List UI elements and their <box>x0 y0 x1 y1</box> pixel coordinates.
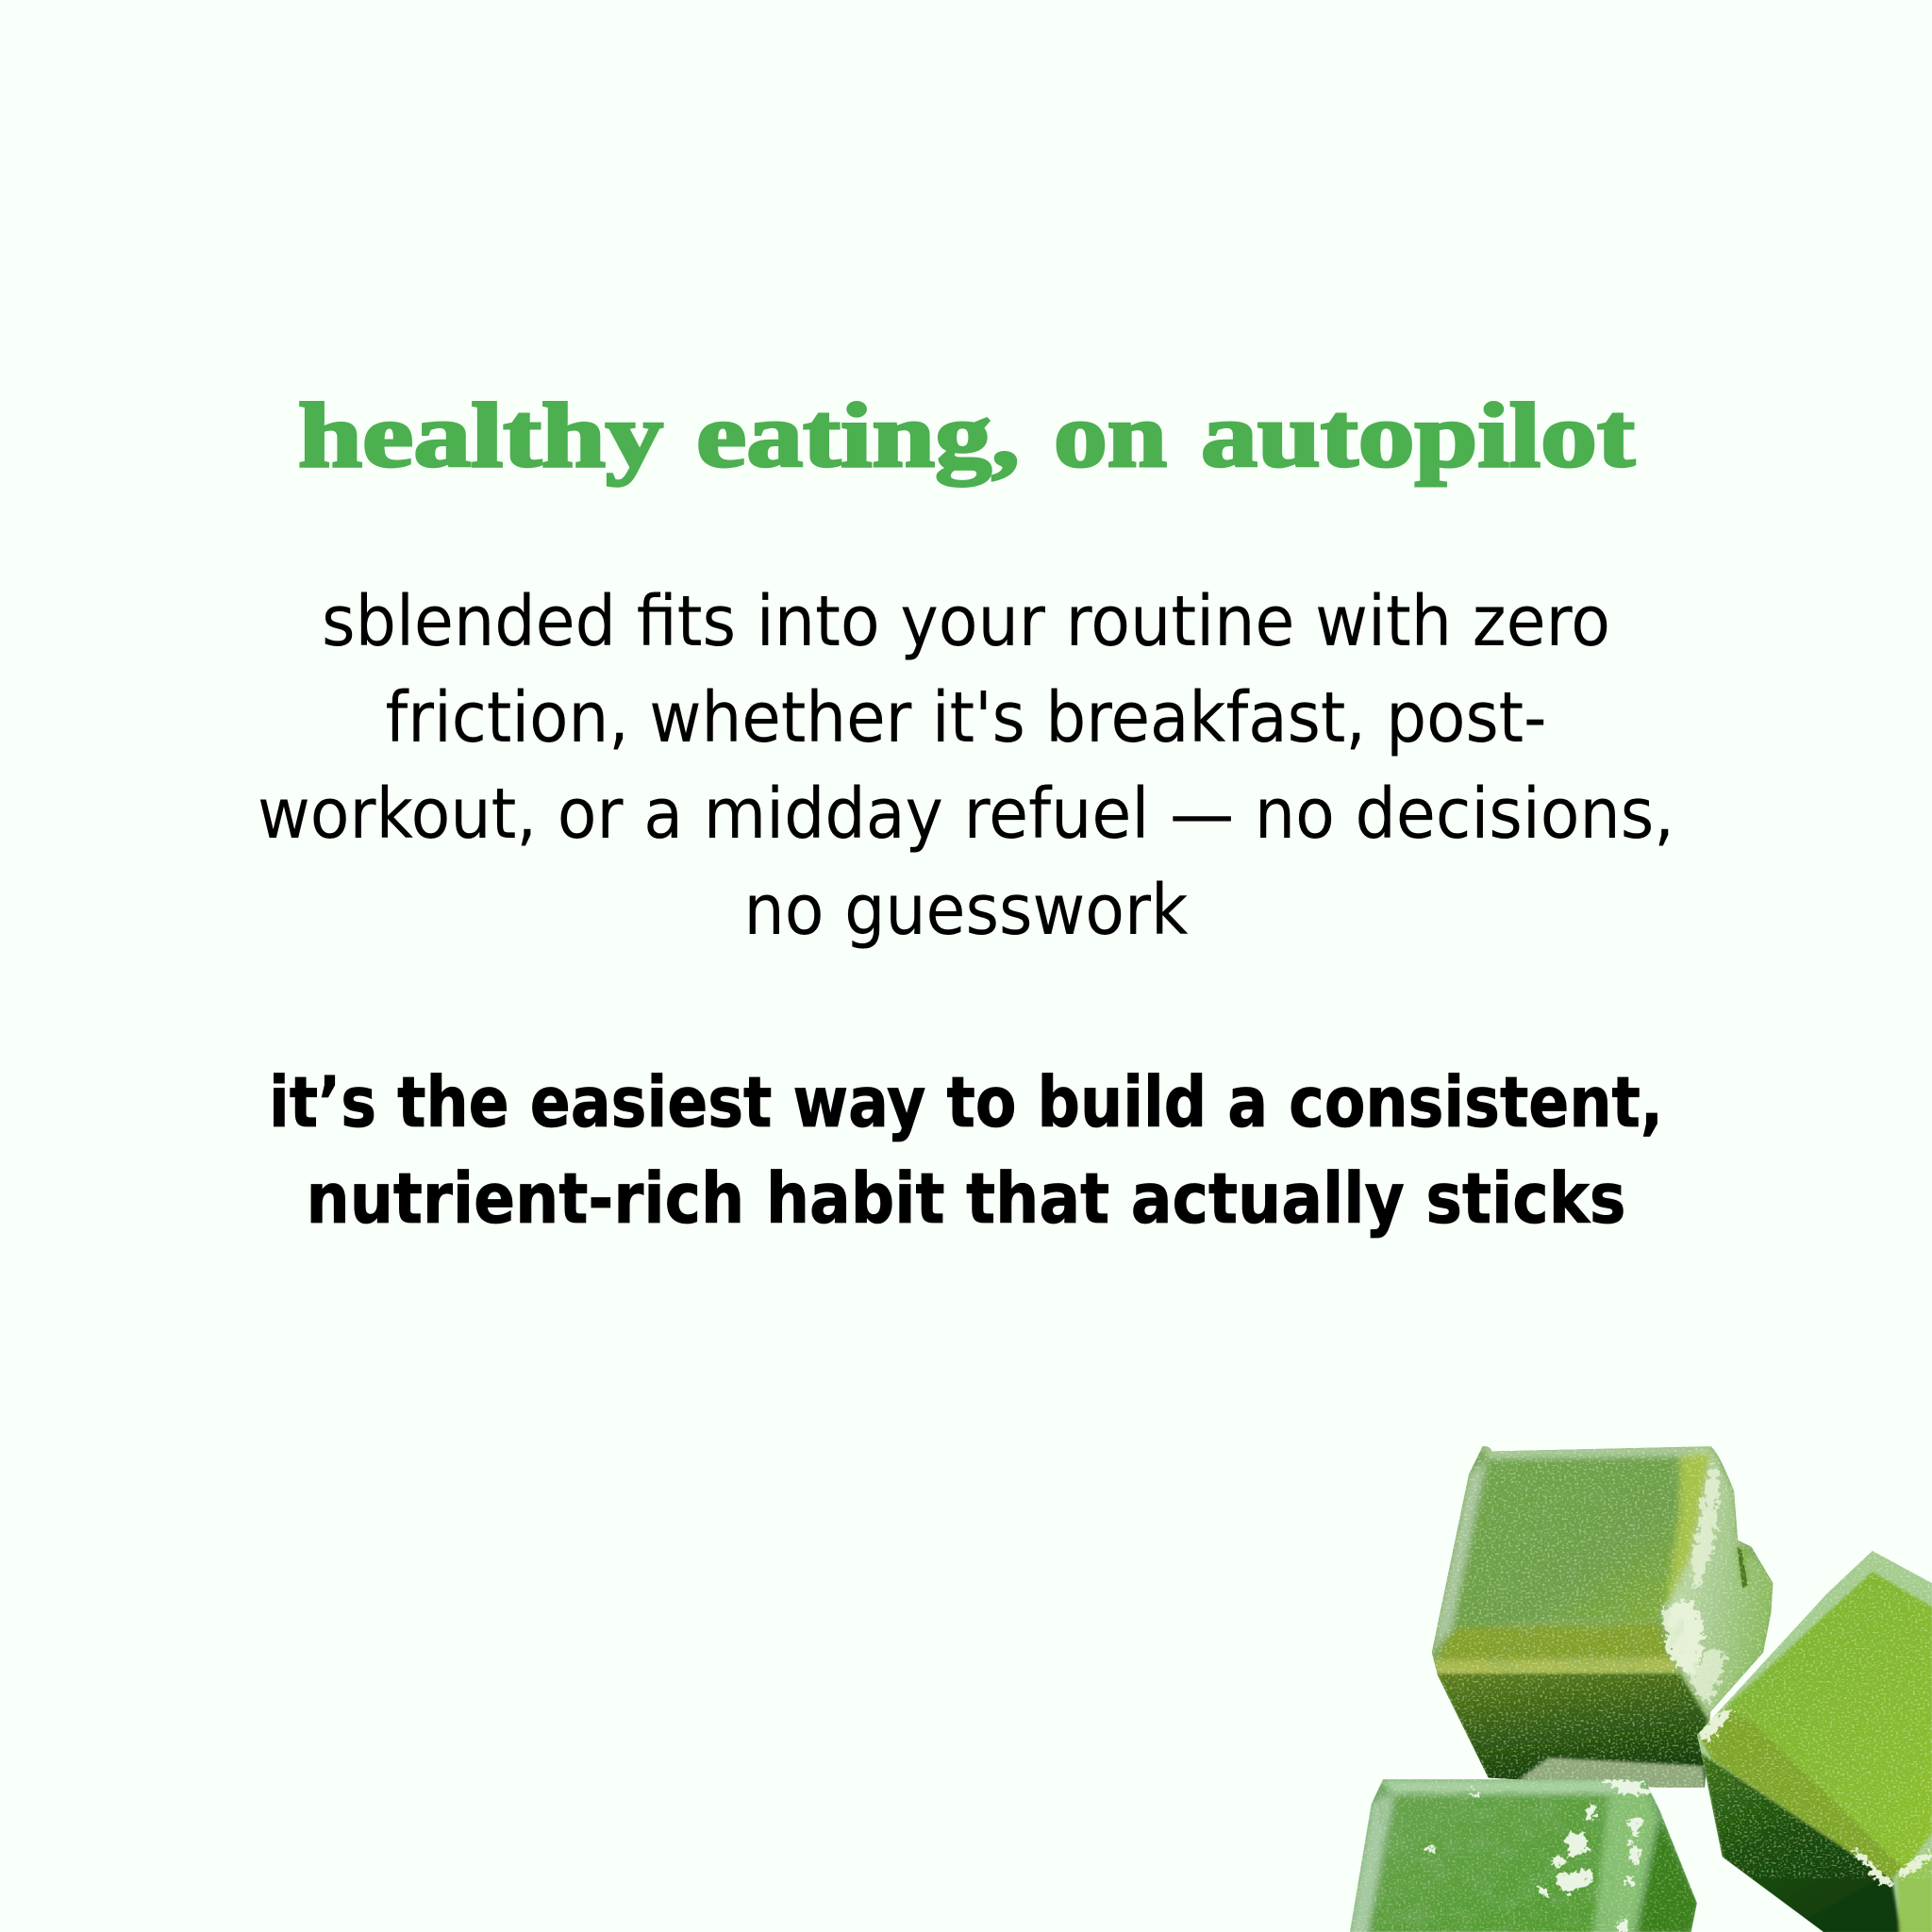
title: on <box>1054 385 1167 487</box>
title: autopilot <box>1201 385 1635 487</box>
body paragraph: sblended fits into your routine with zero <box>322 581 1610 662</box>
bold statement: it’s the easiest way to build a consistent, <box>269 1062 1663 1143</box>
bold statement <box>269 1062 1663 1240</box>
title: eating, <box>696 385 1020 487</box>
bold statement: nutrient-rich habit that actually sticks <box>306 1158 1626 1240</box>
body paragraph: workout, or a midday refuel — no decisions, <box>258 774 1674 855</box>
title <box>298 385 1635 487</box>
frost on the right edge <box>1662 1464 1726 1706</box>
body paragraph: friction, whether it's breakfast, post- <box>385 677 1547 758</box>
title: healthy <box>298 385 663 487</box>
cube: top <box>1426 1441 1777 1790</box>
frost patches <box>1424 1779 1646 1932</box>
frozen green smoothie cubes <box>1348 1441 1932 1932</box>
body paragraph <box>258 581 1674 951</box>
frost on the lower edge <box>1699 1707 1932 1885</box>
body paragraph: no guesswork <box>743 870 1189 951</box>
cube: bottom left <box>1348 1777 1699 1932</box>
cube: right <box>1695 1549 1932 1932</box>
